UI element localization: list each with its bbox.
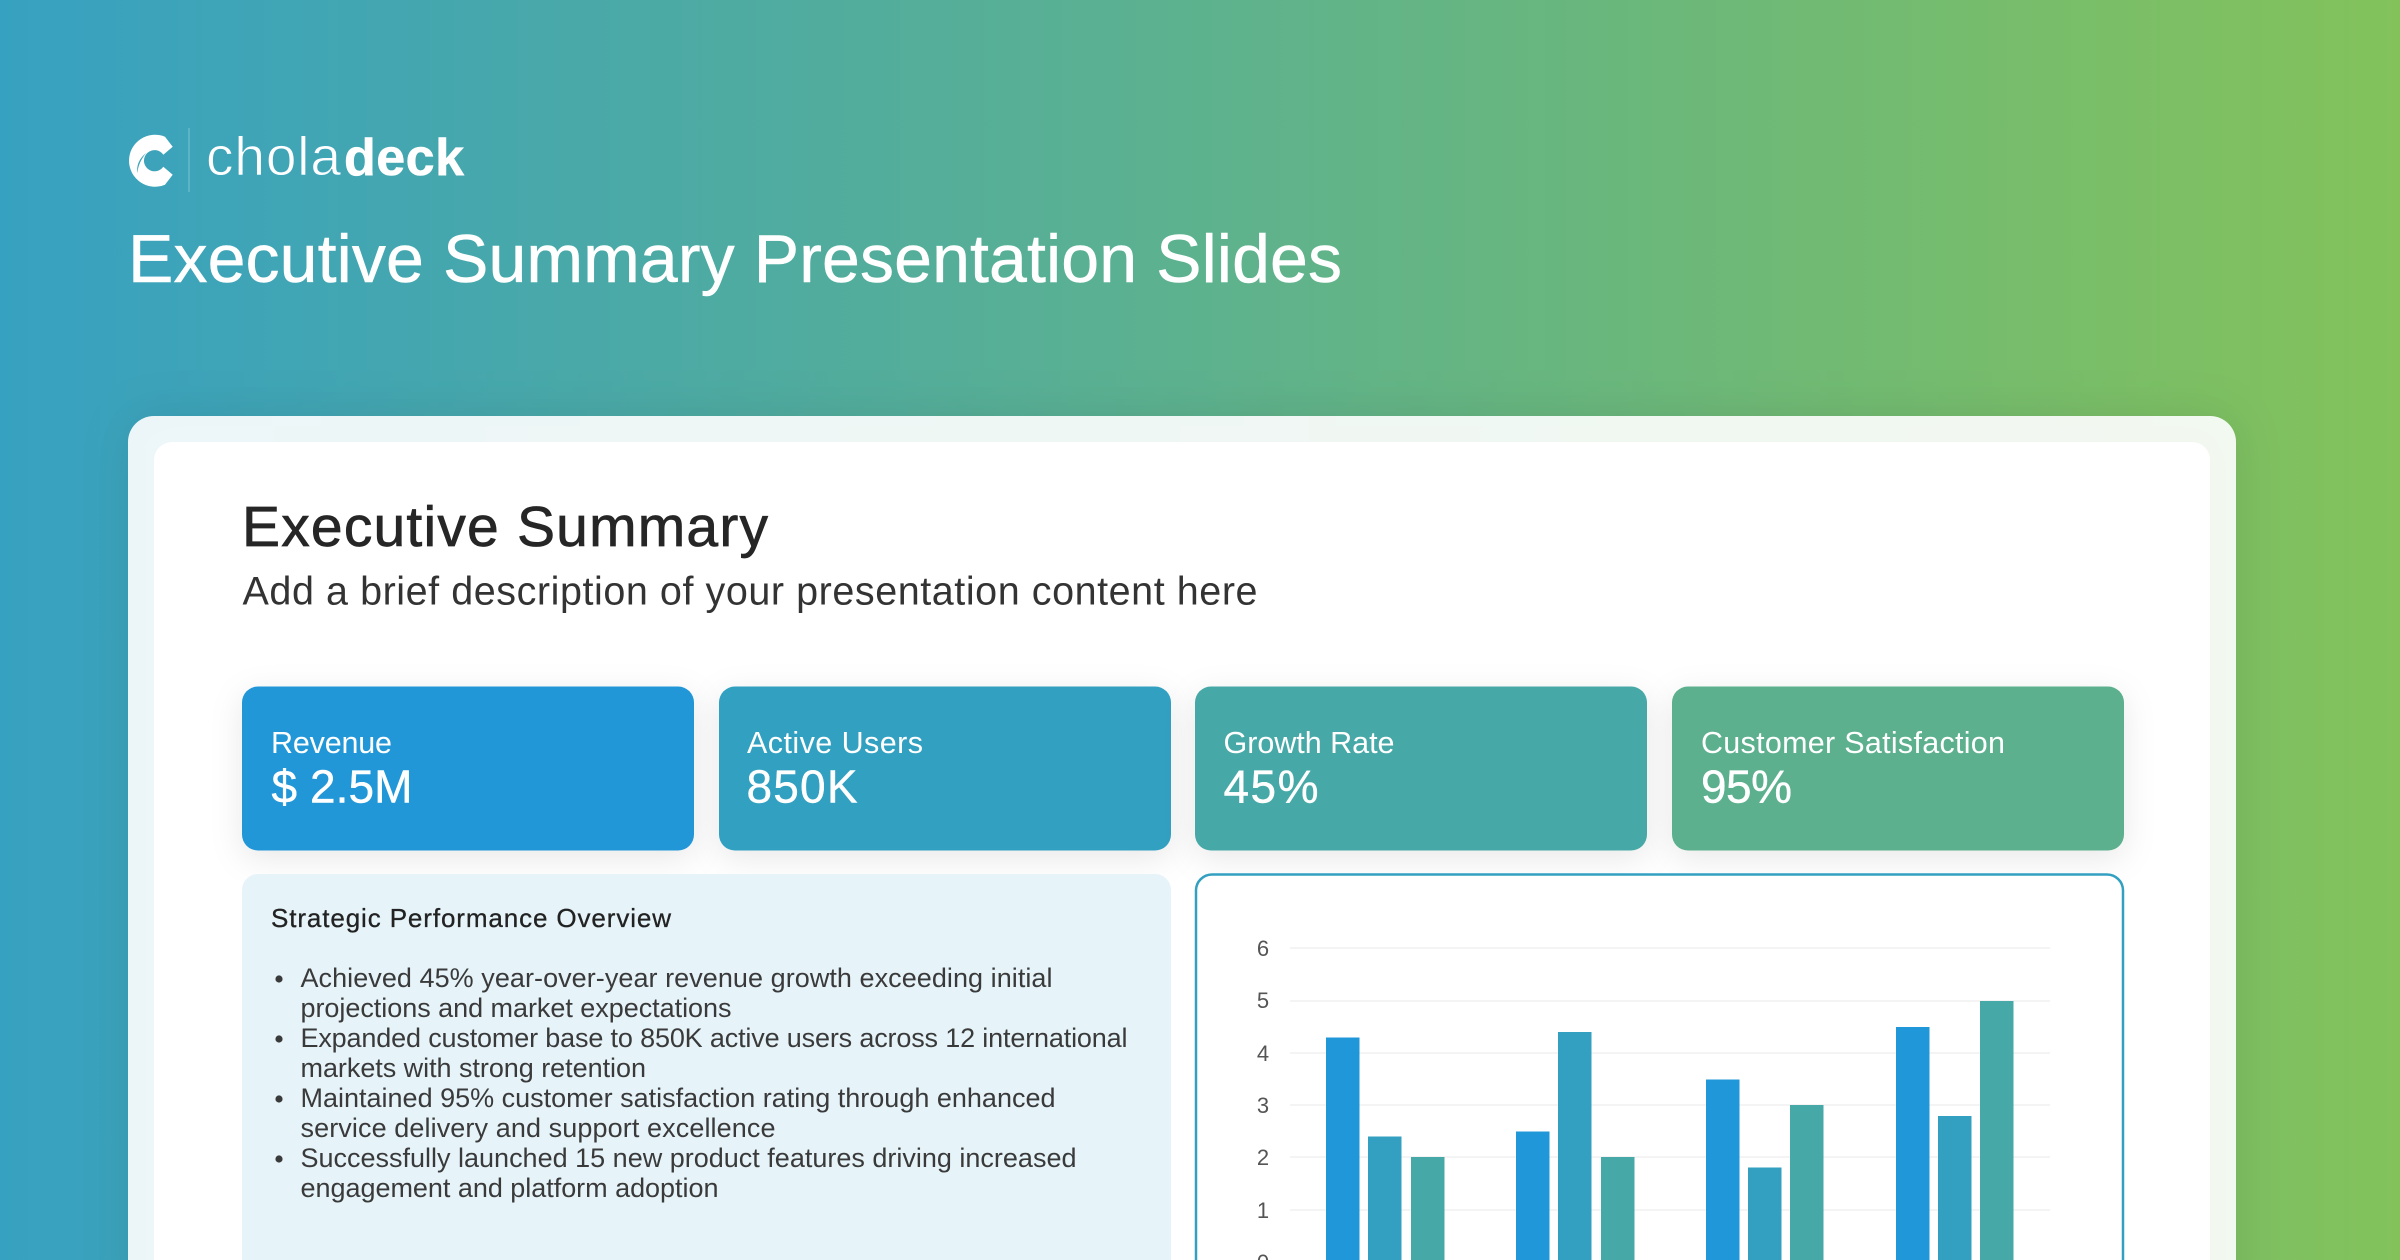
bullet 4: Successfully launched 15 new product features driving increased [300, 1143, 1076, 1173]
bullet 2: markets with strong retention [300, 1053, 646, 1083]
bullet 3: service delivery and support excellence [300, 1113, 776, 1143]
y-axis labels: 1 [1257, 1198, 1269, 1223]
KPI card: Growth Rate: 45% [1224, 760, 1318, 812]
logo wordmark [206, 125, 464, 187]
bar group 1 [1326, 1038, 1444, 1260]
KPI card: Customer Satisfaction: 95% [1701, 760, 1792, 812]
bullet 2: Expanded customer base to 850K active users across 12 international [300, 1023, 1128, 1053]
page title: Executive Summary Presentation Slides [128, 221, 1342, 297]
KPI card: Customer Satisfaction [1672, 686, 2124, 850]
logo divider [188, 128, 190, 192]
KPI card: Customer Satisfaction: Customer Satisfaction [1701, 726, 2005, 760]
KPI card: Growth Rate [1195, 686, 1647, 850]
KPI card: Revenue: $ 2.5M [272, 760, 412, 812]
icon: C mark [129, 135, 173, 187]
logo: choladeck [129, 125, 464, 192]
bar group 4 [1896, 1001, 2014, 1260]
bullet 4 [275, 1143, 1076, 1203]
KPI card: Active Users [719, 686, 1171, 850]
bullet 4: engagement and platform adoption [300, 1173, 718, 1203]
bar group 2 [1516, 1032, 1634, 1260]
bullet 1: projections and market expectations [300, 993, 732, 1023]
bullet 1: Achieved 45% year-over-year revenue growth exceeding initial [300, 963, 1052, 993]
y-axis labels: 5 [1257, 988, 1269, 1013]
bullet list [275, 963, 1127, 1203]
panel heading: Strategic Performance Overview [271, 903, 671, 933]
bullet 2 [275, 1023, 1127, 1083]
logo wordmark: chola [206, 125, 341, 187]
bar group 3 [1706, 1080, 1824, 1260]
KPI card: Revenue [242, 686, 694, 850]
bullet 3 [275, 1083, 1055, 1143]
panel: slide inner sheet [154, 442, 2210, 1260]
heading: Executive Summary: Executive Summary [242, 495, 768, 559]
logo wordmark: deck [344, 129, 464, 187]
subheading: Add a brief description of your presentation content here [242, 570, 1258, 614]
KPI card: Revenue: Revenue [271, 726, 392, 760]
panel: Strategic Performance Overview [242, 874, 1171, 1260]
KPI card: Active Users: Active Users [747, 726, 923, 760]
panel: bar chart [1196, 874, 2123, 1260]
KPI card: Active Users: 850K [746, 760, 858, 812]
y-axis labels: 3 [1257, 1093, 1269, 1118]
y-axis labels: 6 [1257, 936, 1269, 961]
bullet 3: Maintained 95% customer satisfaction rating through enhanced [300, 1083, 1056, 1113]
KPI card: Growth Rate: Growth Rate [1224, 726, 1394, 760]
bullet 1 [275, 963, 1052, 1023]
y-axis labels [1257, 936, 1269, 1260]
chart gridlines [1290, 948, 2050, 1210]
y-axis labels: 2 [1257, 1145, 1269, 1170]
panel: slide outer frame [128, 416, 2236, 1260]
y-axis labels: 4 [1257, 1041, 1269, 1066]
